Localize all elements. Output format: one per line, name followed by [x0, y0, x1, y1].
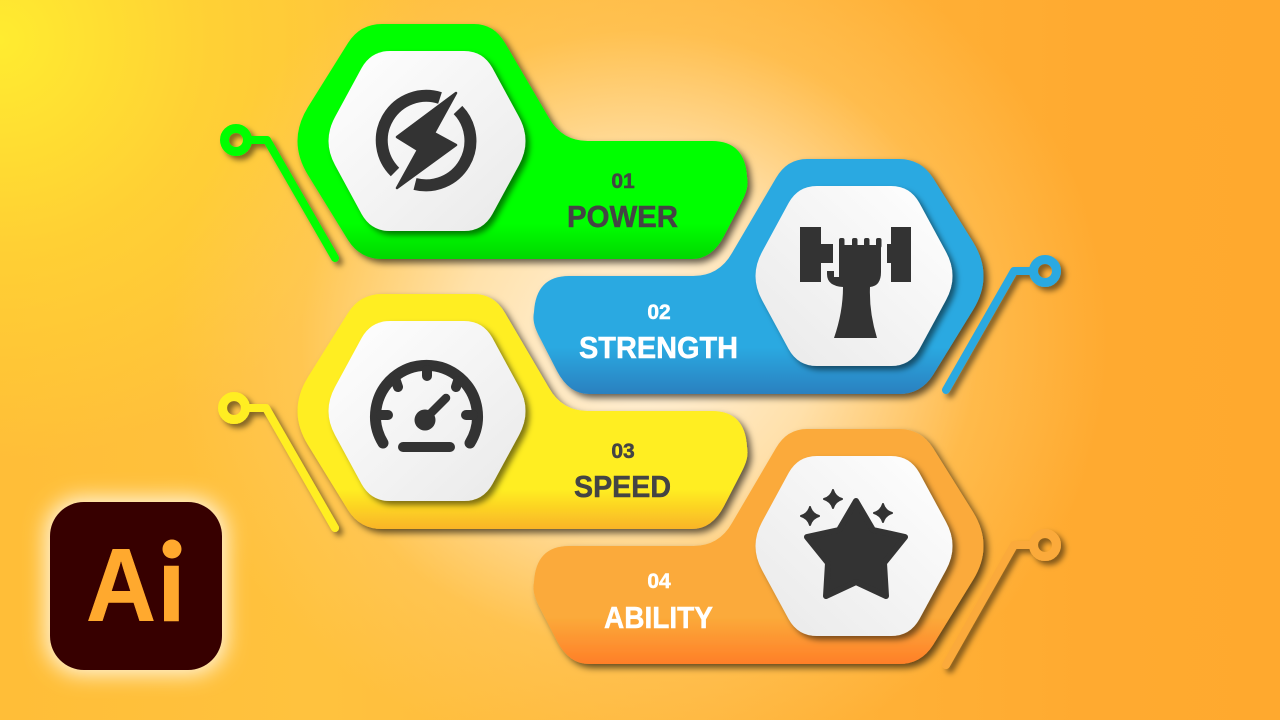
- panel: speed shape: [298, 294, 748, 529]
- hexagon: power icon plate: [328, 51, 526, 231]
- label: STRENGTH: STRENGTH: [579, 330, 738, 365]
- connector: ability: [946, 534, 1056, 665]
- label: POWER: POWER: [567, 199, 678, 234]
- card 03: speed: [222, 294, 748, 529]
- connector: speed: [222, 396, 335, 528]
- panel: strength shape: [533, 159, 984, 394]
- icon: star with sparkles: [801, 490, 905, 596]
- logo: Adobe Illustrator: A: [86, 528, 156, 644]
- hexagon: ability icon plate: [756, 456, 952, 636]
- card 01: power: [224, 24, 748, 259]
- icon: fist with dumbbell: [800, 227, 911, 338]
- label: SPEED: SPEED: [574, 469, 671, 504]
- icon: lightning bolt in ring: [382, 93, 470, 188]
- label: 01: 01: [611, 170, 635, 193]
- connector: power: [224, 128, 335, 258]
- panel: power shape: [298, 24, 748, 259]
- label: 04: 04: [647, 570, 671, 593]
- card 02: strength: [533, 159, 1056, 394]
- label: ABILITY: ABILITY: [604, 600, 713, 635]
- label: 03: 03: [611, 440, 635, 463]
- card 04: ability: [533, 429, 1056, 665]
- label: 02: 02: [647, 301, 671, 324]
- icon: speedometer: [376, 365, 478, 447]
- panel: ability shape: [533, 429, 984, 664]
- hexagon: strength icon plate: [756, 186, 952, 366]
- logo: Adobe Illustrator: [46, 498, 226, 674]
- connector: strength: [946, 260, 1056, 390]
- hexagon: speed icon plate: [328, 321, 526, 501]
- logo: Adobe Illustrator: i: [157, 528, 186, 644]
